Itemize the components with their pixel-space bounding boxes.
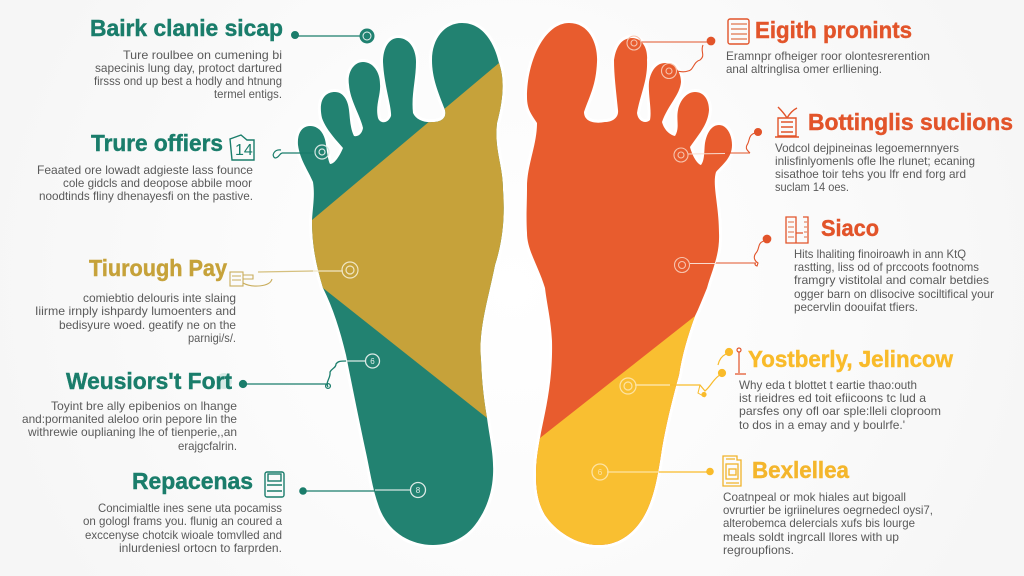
connector and marker (674, 128, 762, 162)
text block: pecervlin doouifat tfiers. (794, 300, 918, 314)
text block (22, 399, 237, 453)
text block: cole gidcls and deopose abbile moor (63, 176, 252, 190)
text block: Coatnpeal or mok hiales aut bigoall (723, 490, 906, 504)
icon: building chart (786, 217, 808, 243)
text block: parsfes ony ofl oar sple:lleli cloproom (739, 404, 941, 418)
text block: and:pormanited aleloo orin pepore lin the (22, 412, 237, 426)
icon: small device (230, 272, 272, 286)
connector and marker (273, 145, 329, 159)
icon: gift box (775, 107, 799, 137)
icon: stacked document (728, 19, 749, 44)
heading: Trure offiers (91, 130, 223, 156)
text block (35, 291, 236, 345)
connector and markers (627, 36, 715, 78)
connector and marker (292, 28, 374, 44)
text block: Hits lhaliting finoiroawh in ann KtQ (794, 247, 966, 261)
text block: Why eda t blottet t eartie thao:outh (739, 378, 917, 392)
panel: Bottinglis suclions (674, 107, 1013, 194)
text block: suclam 14 oes. (775, 180, 849, 194)
panel: Repacenas (83, 468, 426, 555)
icon: lamp post (735, 348, 746, 374)
text block: erajgcfalrin. (178, 439, 237, 453)
heading: Repacenas (132, 468, 253, 494)
heading: Bottinglis suclions (808, 109, 1013, 135)
text block: meals soldt ingrcall llores with up (723, 530, 899, 544)
heading: Bairk clanie sicap (90, 15, 283, 41)
text block: Toyint bre ally epibenios on lhange (51, 399, 237, 413)
text block: Ture roulbee on cumening bi (123, 48, 282, 62)
connector and marker (258, 262, 358, 278)
panel: Trure offiers (37, 130, 329, 203)
panel: Weusiors't Fort (22, 354, 380, 453)
right foot (526, 23, 732, 545)
text block: to dos in a emay and y boulrfe.' (739, 418, 905, 432)
text block: on gologl frams you. flunig an coured a (83, 514, 282, 528)
connector and marker (299, 482, 426, 498)
panel: Siaco (674, 215, 994, 314)
text block: Iiirme irnply ishpardy lumoenters and (35, 304, 236, 318)
text block: termel entigs. (214, 87, 282, 101)
text block: comiebtio delouris inte slaing (83, 291, 236, 305)
left foot (298, 23, 504, 545)
text block: Concimialtle ines sene uta pocamiss (98, 501, 282, 515)
text block: noodtinds fliny dhenayesfi on the pastive. (39, 189, 253, 203)
text block (794, 247, 994, 314)
text block (83, 501, 282, 555)
icon: printer (265, 472, 284, 497)
connector and marker: 6 (598, 468, 603, 477)
heading: Weusiors't Fort (66, 368, 232, 394)
connector and marker (674, 235, 771, 272)
text block: sisathoe toir tehs you lfr end forg ard (775, 167, 966, 181)
text block: Eramnpr ofheiger roor olontesrerention (726, 49, 930, 63)
icon: framed picture (723, 456, 741, 486)
text block: framgry vistitolal and comalr betdies (794, 273, 989, 287)
text block: withrewie ouplianing lhe of tienperie,,an (27, 425, 237, 439)
text block: regroupfions. (723, 543, 794, 557)
text block: Feaated ore lowadt adgieste lass founce (37, 163, 253, 177)
text block: ogger barn on dlisocive sociltifical your (794, 287, 994, 301)
connector and marker: 8 (416, 486, 421, 495)
text block (739, 378, 941, 432)
icon: document with number (230, 135, 254, 160)
heading: Tiurough Pay (89, 255, 227, 281)
heading: Yostberly, Jelincow (748, 346, 954, 372)
text block: Vodcol dejpineinas legoemernnyers (775, 141, 959, 155)
icon: document with number: 14 (235, 142, 253, 159)
text block (37, 163, 253, 203)
panel: Bairk clanie sicap (90, 15, 374, 101)
panel: Yostberly, Jelincow (620, 346, 954, 432)
connector and marker: 6 (370, 357, 375, 366)
text block: ovrurtier be igriinelures oegrnedecl oysi7, (723, 503, 933, 517)
text block: alterobemca delercials xufs bis lourge (723, 516, 915, 530)
connector and marker (592, 464, 714, 480)
panel: Bexlellea (592, 456, 933, 557)
text block: inlurdeniesl ortocn to farprden. (119, 541, 282, 555)
text block (726, 49, 930, 76)
pale glyph behind heading end (216, 373, 232, 389)
connector and marker (240, 354, 380, 388)
text block (94, 48, 282, 101)
text block (775, 141, 975, 194)
panel: Eigith pronints (627, 17, 930, 78)
text block: exccenyse chotcik wioale tomvlled and (85, 528, 282, 542)
text block: parnigi/s/. (188, 331, 236, 345)
text block: sapecinis lung day, protoct dartured (95, 61, 282, 75)
text block (723, 490, 933, 557)
heading: Eigith pronints (755, 17, 912, 43)
text block: anal altringlisa omer erlliening. (726, 62, 882, 76)
panel: Tiurough Pay (35, 255, 358, 345)
heading: Bexlellea (752, 457, 850, 483)
text block: ist rieidres ed toit efiicoons tc lud a (739, 391, 926, 405)
connector and markers (620, 348, 732, 397)
text block: rastting, liss od of prccoots footnoms (794, 260, 979, 274)
text block: bedisyure woed. geatify ne on the (59, 318, 236, 332)
text block: firsss ond up best a hodly and htnung (94, 74, 282, 88)
text block: inlisfinlyomenls ofle lhe rlunet; ecaning (775, 154, 975, 168)
heading: Siaco (821, 215, 879, 241)
